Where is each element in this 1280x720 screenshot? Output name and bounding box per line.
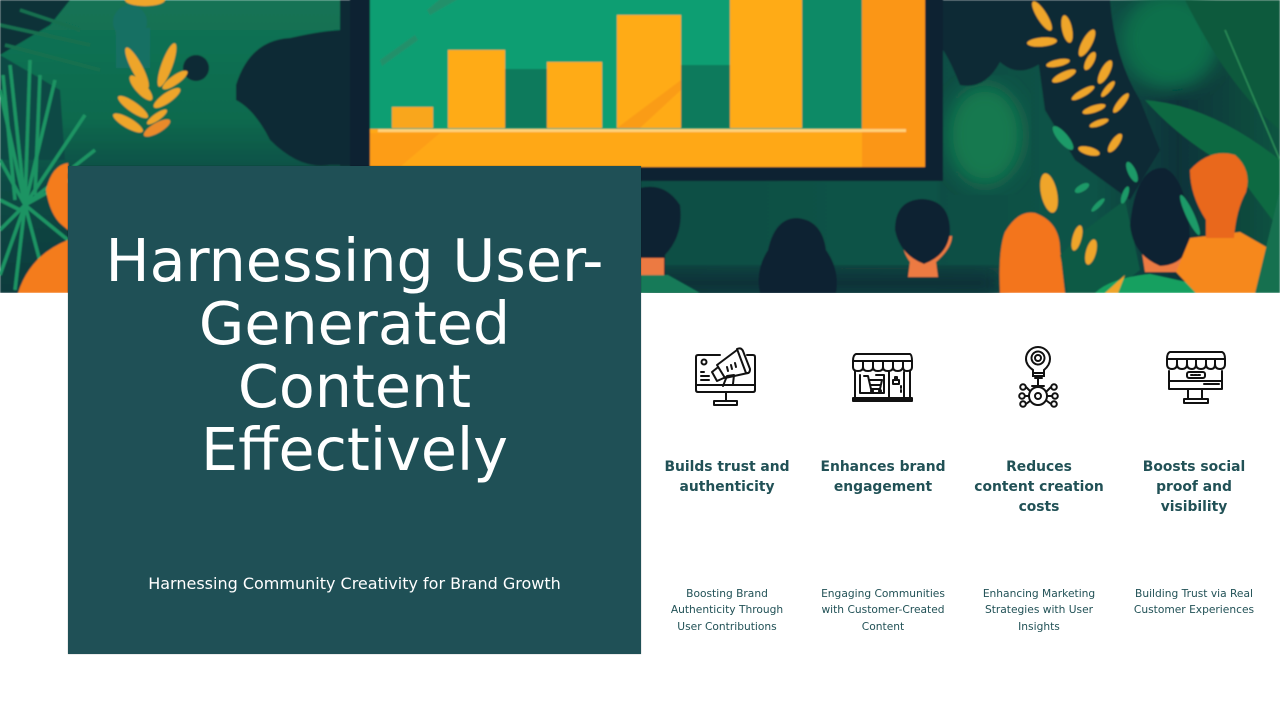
heading: boosts social proof: proof and [1156,478,1232,494]
description: boosts social proof: Customer Experiences [1134,603,1254,616]
heading: builds trust: authenticity [680,478,774,494]
presentation screen [370,0,925,167]
left audience figure [18,163,68,293]
description: enhances engagement: with Customer-Created [821,603,945,616]
heading: enhances engagement [820,458,946,494]
description: boosts social proof: Building Trust via Real [1135,586,1253,600]
jungle background [0,0,1280,298]
title: Content [238,353,471,421]
heading: boosts social proof: Boosts social [1143,458,1245,474]
subtitle: Harnessing Community Creativity for Brand Growth [148,574,561,592]
green foliage [1050,123,1280,293]
heading: builds trust: Builds trust and [664,458,790,474]
heading: boosts social proof [1143,458,1245,514]
title: Harnessing User- [106,226,603,294]
title panel [68,166,641,654]
description: enhances engagement [821,586,945,632]
icon: monitor with megaphone [695,347,756,406]
heading: reduces costs: costs [1019,498,1059,514]
title: Effectively [201,416,508,484]
icon: light bulb with gear and network [1018,346,1059,408]
description: reduces costs: Enhancing Marketing [983,586,1095,600]
description: enhances engagement: Engaging Communities [821,586,945,600]
dark tree silhouettes [183,0,1160,200]
description: reduces costs: Insights [1018,620,1060,632]
icon: storefront with cart [852,353,913,402]
description: builds trust [671,586,783,632]
left leaf sprig [111,42,190,140]
presentation screen frame [350,0,943,181]
description: builds trust: Boosting Brand [686,586,768,600]
right leaf sprig [1027,0,1131,293]
audience silhouettes [640,153,1272,293]
description: builds trust: Authenticity Through [671,603,783,616]
palm fronds [0,10,100,290]
heading: enhances engagement: Enhances brand [820,458,946,474]
title [106,226,603,484]
description: boosts social proof [1134,586,1254,616]
heading: boosts social proof: visibility [1161,498,1227,514]
heading: enhances engagement: engagement [834,478,932,494]
description: builds trust: User Contributions [677,620,777,632]
heading: builds trust [664,458,790,494]
bar chart [392,0,862,128]
teal figure and top ornament [113,0,165,68]
title: Generated [199,290,510,358]
description: enhances engagement: Content [862,620,904,632]
heading: reduces costs: Reduces [1006,458,1072,474]
heading: reduces costs [974,458,1104,514]
description: reduces costs [983,586,1095,632]
heading: reduces costs: content creation [974,478,1104,494]
banner illustration [0,0,1280,293]
description: reduces costs: Strategies with User [985,603,1093,616]
icon: online storefront monitor [1166,351,1226,404]
